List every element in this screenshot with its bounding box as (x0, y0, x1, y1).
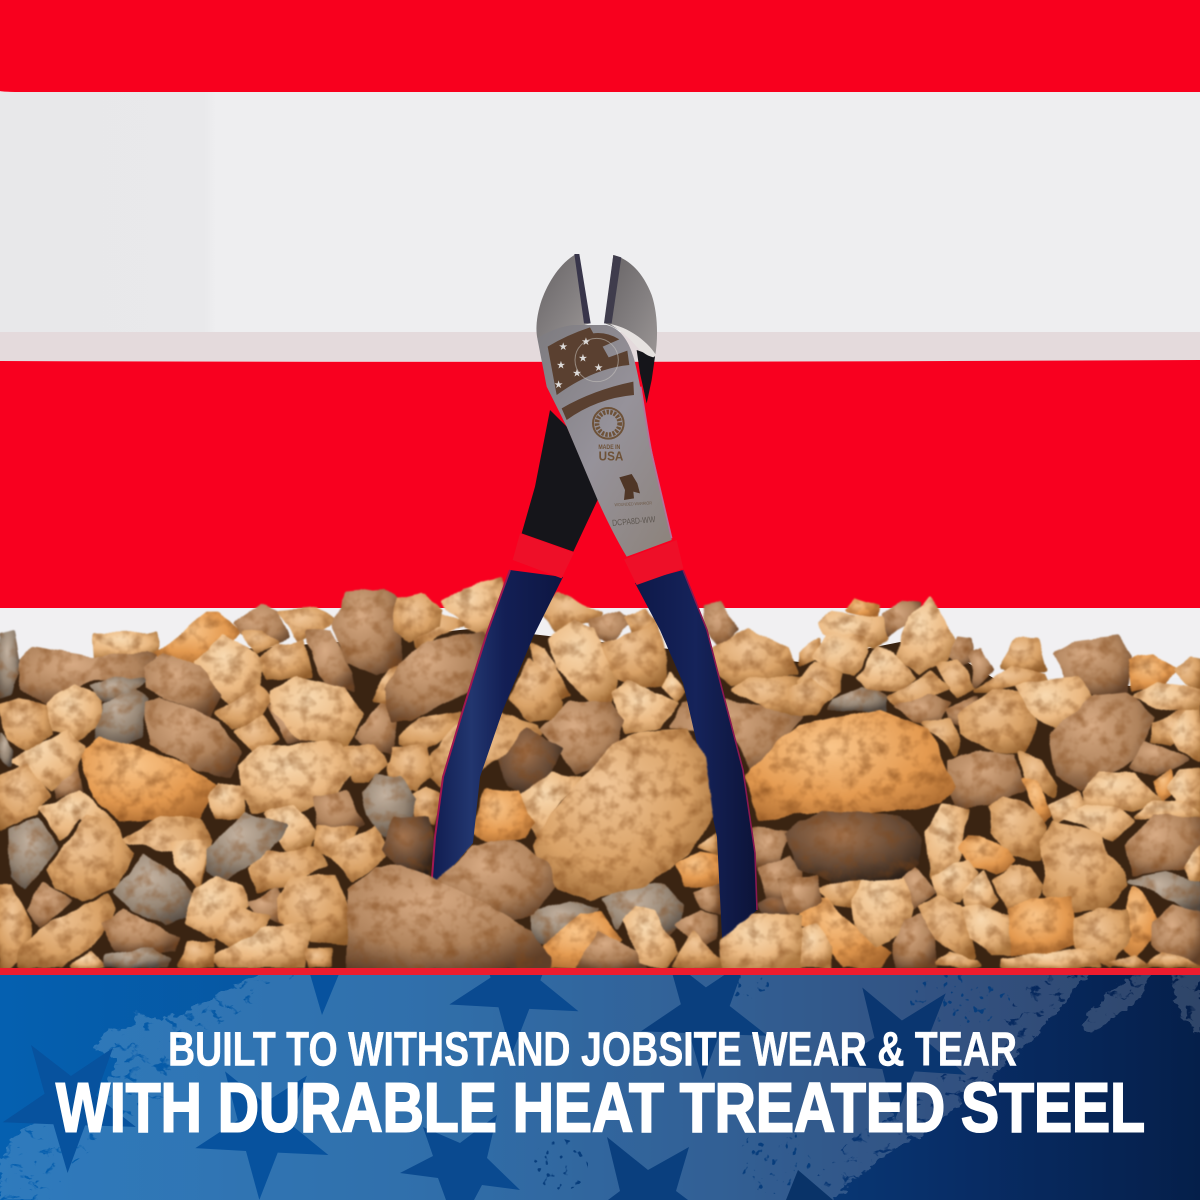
left jaw cutting edge (574, 254, 591, 323)
engraved flag: ★ (554, 379, 564, 391)
rock pile: front layer (348, 730, 800, 968)
engraved made in USA mark: MADE IN (598, 444, 620, 451)
engraved soldier silhouette (619, 474, 640, 500)
engraved made in USA mark (598, 444, 624, 463)
pliers head, drawn at zoom scale (513, 254, 683, 585)
red divider bar (0, 968, 1200, 975)
front arm coloured bevel (641, 387, 672, 538)
pale shadow band (0, 332, 1200, 361)
engraved charity line: WOUNDED WARRIOR (614, 500, 652, 507)
engraved flag: ★ (572, 368, 582, 380)
engraved roundel logo (593, 408, 624, 439)
engraved flag: ★ (594, 362, 604, 374)
middle red stripe (0, 360, 1200, 610)
right handle, navy grip (635, 570, 757, 942)
white stripe (0, 92, 1200, 334)
red left sleeve (513, 533, 574, 578)
diagonal cutting pliers (432, 254, 757, 942)
rock pile: back layer (0, 580, 1200, 968)
right jaw bright chamfer (610, 324, 656, 357)
right jaw cutting edge (604, 255, 621, 323)
red right sleeve (624, 540, 683, 585)
engraved flag (548, 327, 634, 420)
engraved flag: ★ (556, 359, 566, 371)
left jaw (536, 254, 590, 338)
top red stripe (0, 0, 1200, 94)
left handle, navy grip (432, 570, 563, 882)
right jaw (605, 255, 657, 357)
engraved flag: ★ (559, 341, 569, 353)
engraved model number: DCPA8D-WW (612, 514, 656, 528)
engraved flag: ★ (578, 353, 588, 365)
front arm, polished steel (537, 325, 672, 557)
back arm, black forged steel (522, 350, 655, 552)
engraved made in USA mark: USA (599, 448, 624, 463)
bottom banner (0, 968, 1200, 1200)
distressed brush and stars (0, 975, 1200, 1200)
blue gradient field (0, 975, 1200, 1200)
engraved flag: ★ (581, 336, 591, 348)
lower white stripe (0, 608, 1200, 678)
